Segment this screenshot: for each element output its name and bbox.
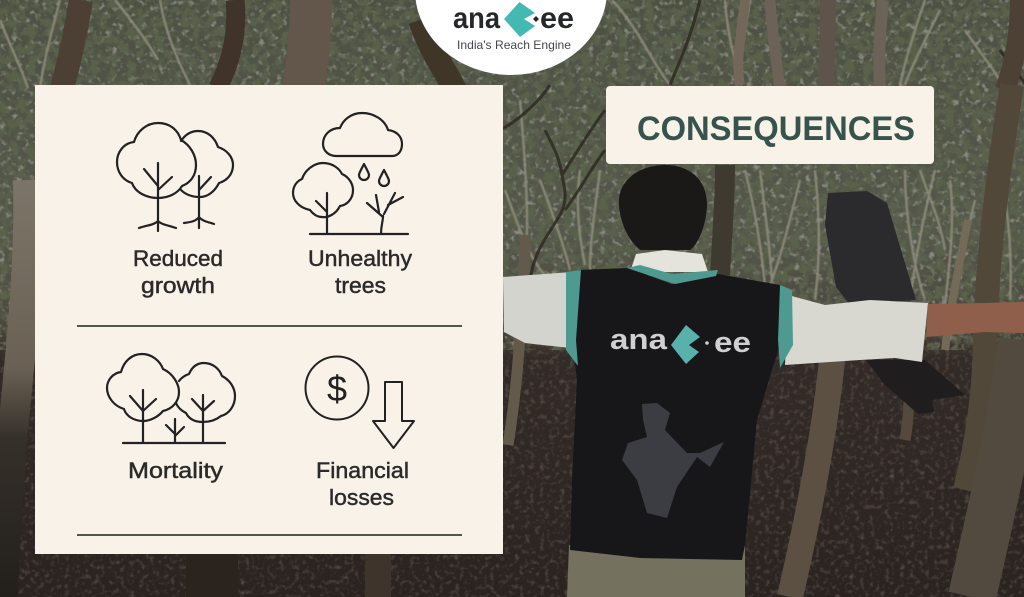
title: CONSEQUENCES (637, 110, 915, 148)
forearm and hand (926, 302, 1024, 337)
icon: unhealthy trees (293, 113, 408, 234)
black cloth hanging on branch (825, 191, 965, 414)
label: unhealthy trees: Unhealthy (308, 246, 412, 271)
label: reduced growth: Reduced (133, 246, 223, 271)
vest logo: ee (714, 327, 751, 359)
label: unhealthy trees second line: trees (335, 273, 386, 298)
logo tagline: India's Reach Engine (457, 38, 571, 52)
vest logo: ana (610, 324, 668, 356)
trousers (567, 545, 745, 597)
logo wordmark: ana (453, 2, 500, 35)
label: financial losses: Financial (316, 458, 409, 483)
vest logo (610, 324, 751, 364)
logo badge (415, 0, 607, 75)
India map on vest (622, 403, 724, 518)
panel: consequences list (35, 85, 503, 554)
head (619, 165, 707, 250)
icon: dollar coin and down arrow (306, 356, 414, 448)
left sleeve (503, 272, 572, 348)
icon: reduced growth trees (117, 123, 233, 231)
logo wordmark: ee (540, 2, 574, 35)
label: financial losses second line: losses (329, 485, 394, 510)
icon: mortality trees (107, 354, 235, 443)
vest (570, 268, 785, 560)
icon: dollar coin and down arrow: $ (327, 368, 347, 409)
title box (606, 86, 934, 164)
label: reduced growth second line: growth (141, 273, 215, 298)
collar (630, 250, 708, 272)
person from behind (503, 165, 1024, 597)
logo wordmark (453, 2, 574, 37)
vest trims (566, 270, 581, 366)
right sleeve (785, 295, 928, 365)
label: mortality: Mortality (128, 458, 223, 483)
